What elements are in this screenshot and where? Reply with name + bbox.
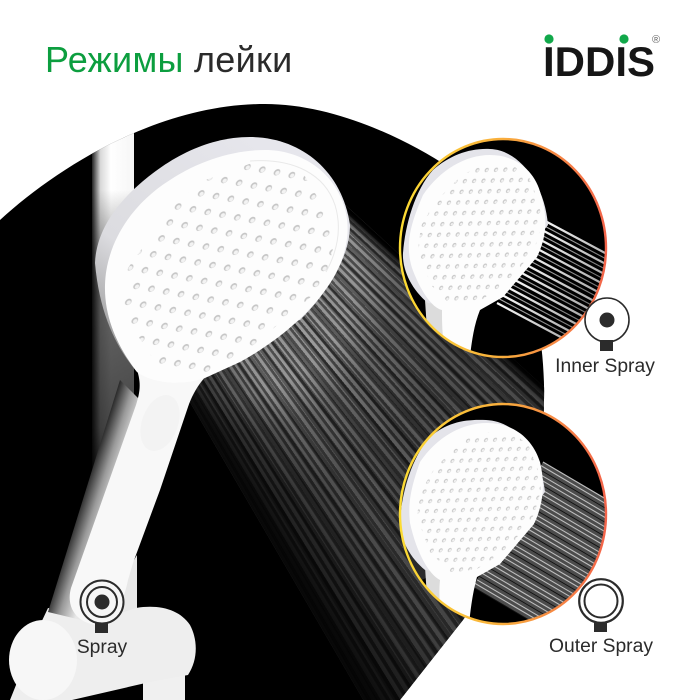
label: inner spray: Inner Spray — [555, 356, 655, 377]
nozzle holes — [418, 432, 541, 572]
title: Режимы лейки — [45, 38, 292, 80]
icon: spray — [80, 580, 124, 633]
inset head — [400, 149, 550, 356]
inset head — [400, 420, 550, 625]
main water spray — [190, 204, 544, 700]
panel: outer spray inset — [398, 402, 608, 626]
nozzle holes — [124, 164, 333, 372]
icon: inner spray — [585, 298, 629, 351]
handle — [48, 370, 206, 625]
vertical pipe — [92, 133, 134, 467]
label: spray: Spray — [77, 637, 128, 658]
logo: IDDIS: ® — [652, 34, 660, 46]
panel: black circular backdrop with main shower photo — [0, 104, 544, 700]
insets and icons overlay — [78, 138, 655, 657]
inner spray rays — [496, 221, 605, 338]
outer spray rays — [474, 462, 605, 620]
label: outer spray: Outer Spray — [549, 636, 653, 657]
panel: inner spray inset — [400, 139, 635, 357]
dark lens area over main spray — [402, 462, 426, 580]
main shower head illustration — [9, 133, 350, 700]
icon: outer spray — [579, 579, 623, 632]
nozzle holes — [418, 167, 540, 300]
swivel holder — [9, 555, 196, 700]
shower head body — [95, 137, 360, 390]
